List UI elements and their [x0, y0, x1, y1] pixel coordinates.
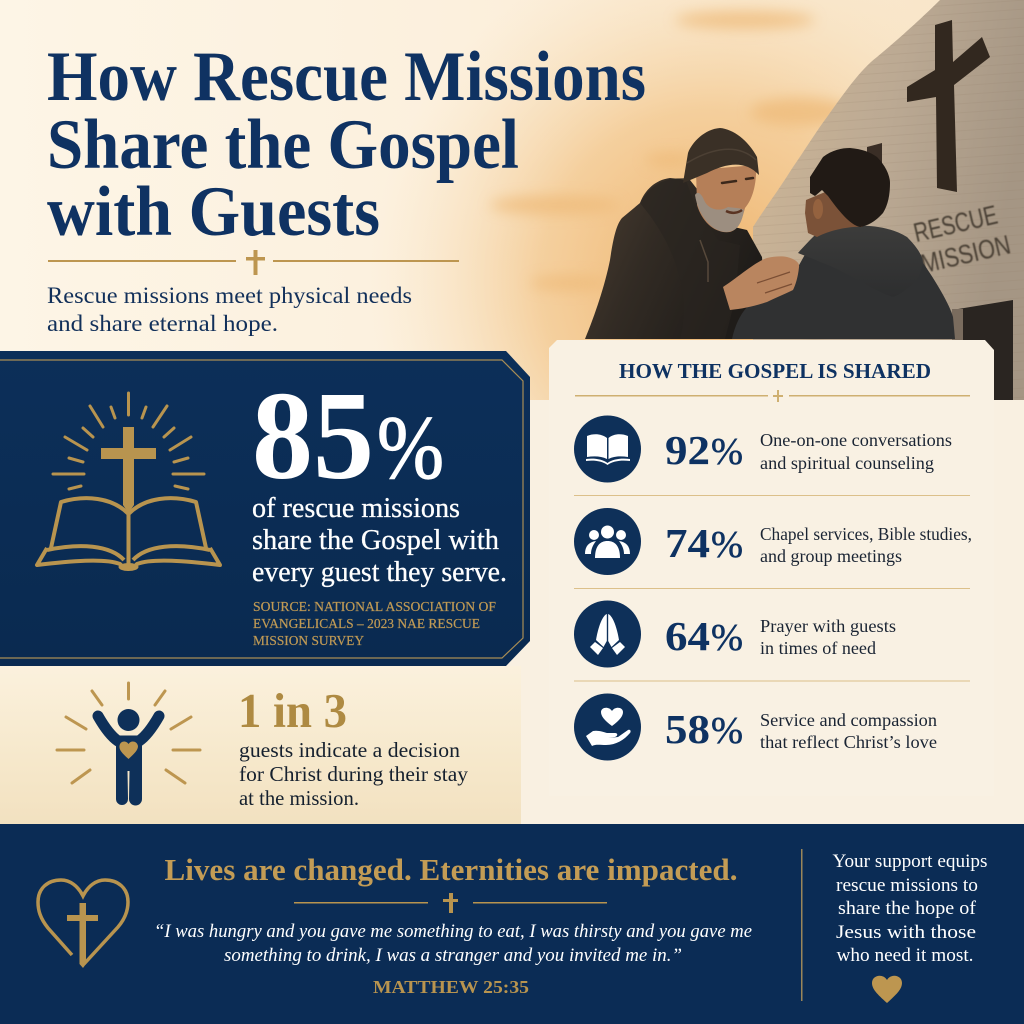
stat text — [252, 493, 507, 588]
beanie — [683, 128, 759, 183]
title — [47, 38, 646, 251]
heading divider — [575, 390, 970, 402]
stat text: guests indicate a decision — [239, 738, 461, 762]
row: 74 percent: % — [711, 524, 743, 566]
support text — [832, 851, 988, 966]
hood — [798, 226, 923, 297]
footer divider with cross — [294, 893, 607, 913]
row: 64 percent: 64 — [665, 613, 710, 659]
icon: person with raised arms and heart — [57, 683, 200, 806]
row: 64 percent: % — [711, 617, 743, 659]
85 percent figure: % — [377, 399, 444, 498]
man from behind — [732, 148, 955, 339]
source — [253, 599, 496, 648]
cream lower background, right — [520, 400, 1024, 824]
icon: open bible with radiant cross — [37, 393, 220, 571]
row: 64 percent: in times of need — [760, 638, 876, 658]
support text: rescue missions to — [836, 875, 978, 896]
stat text — [239, 738, 469, 810]
row: 64 percent — [574, 600, 896, 668]
row: 58 percent: that reflect Christ’s love — [760, 732, 937, 752]
pages — [51, 498, 206, 548]
row: 58 percent: Service and compassion — [760, 710, 937, 730]
row: 92 percent: 92 — [665, 427, 710, 473]
neck and face side — [805, 190, 880, 237]
cover — [37, 548, 220, 568]
icon: heart — [872, 976, 902, 1003]
hand on shoulder — [723, 256, 799, 310]
row: 74 percent: Chapel services, Bible studies, — [760, 524, 972, 544]
eyes and mouth — [722, 178, 753, 183]
panel: 1 in 3 stat — [57, 683, 469, 810]
panel: 85% stat — [0, 351, 530, 666]
row: 58 percent: 58 — [665, 706, 710, 752]
row: 92 percent: % — [711, 431, 743, 473]
title: How Rescue Missions — [47, 38, 646, 116]
row: 92 percent: One-on-one conversations — [760, 430, 952, 450]
title: Share the Gospel — [47, 106, 519, 184]
source: MISSION SURVEY — [253, 633, 364, 648]
title divider with cross — [48, 250, 459, 275]
85 percent figure — [252, 367, 444, 506]
quote citation: MATTHEW 25:35 — [373, 977, 529, 997]
wall sign — [911, 198, 1013, 279]
panel: 1 in 3 background — [0, 666, 521, 824]
hair — [810, 148, 890, 227]
row: 74 percent — [574, 508, 972, 575]
footer heading: Lives are changed. Eternities are impacted. — [164, 852, 738, 887]
icon: heart with cross — [38, 880, 128, 968]
row: 58 percent: % — [711, 710, 743, 752]
stat text: share the Gospel with — [252, 525, 499, 556]
zipper — [700, 240, 708, 282]
lower wall window — [952, 300, 1013, 400]
stat text: for Christ during their stay — [239, 762, 469, 786]
support text: Your support equips — [832, 851, 988, 872]
panel: how the gospel is shared — [549, 340, 994, 796]
icon: praying hands — [590, 614, 625, 655]
row: 58 percent — [574, 694, 937, 760]
stat text: every guest they serve. — [252, 557, 507, 588]
subtitle: and share eternal hope. — [47, 311, 278, 337]
face — [696, 165, 756, 232]
quote: something to drink, I was a stranger and you invited me in.” — [224, 945, 682, 966]
stat text: of rescue missions — [252, 493, 460, 524]
title: with Guests — [47, 173, 380, 251]
row: 74 percent: 74 — [665, 520, 710, 566]
icon: book — [586, 434, 630, 465]
icon: group of people — [585, 526, 630, 558]
support text: who need it most. — [836, 945, 974, 966]
subtitle — [47, 283, 412, 337]
source: SOURCE: NATIONAL ASSOCIATION OF — [253, 599, 496, 614]
man in beanie — [585, 128, 765, 339]
panel heading: HOW THE GOSPEL IS SHARED — [619, 359, 931, 383]
subtitle: Rescue missions meet physical needs — [47, 283, 412, 309]
photo: sunset sky, mission building and two men — [0, 0, 1024, 400]
stat text: at the mission. — [239, 786, 359, 810]
icon: hand holding heart — [586, 708, 631, 746]
wall window slit — [867, 143, 882, 180]
building wall — [753, 0, 1024, 400]
1 in 3 figure: 1 in 3 — [238, 683, 347, 738]
row: 92 percent: and spiritual counseling — [760, 453, 934, 473]
wall cross — [907, 20, 990, 192]
quote: “I was hungry and you gave me something to eat, I was thirsty and you gave me — [154, 921, 752, 942]
wall sign: RESCUE — [911, 200, 1000, 248]
support text: Jesus with those — [836, 922, 976, 943]
row: 64 percent: Prayer with guests — [760, 616, 896, 636]
85 percent figure: 85 — [252, 367, 374, 506]
beard — [695, 193, 744, 232]
quote — [154, 921, 752, 966]
row: 92 percent — [574, 416, 952, 482]
row: 74 percent: and group meetings — [760, 546, 902, 566]
panel: footer — [0, 824, 1024, 1024]
source: EVANGELICALS – 2023 NAE RESCUE — [253, 616, 480, 631]
support text: share the hope of — [838, 898, 977, 919]
